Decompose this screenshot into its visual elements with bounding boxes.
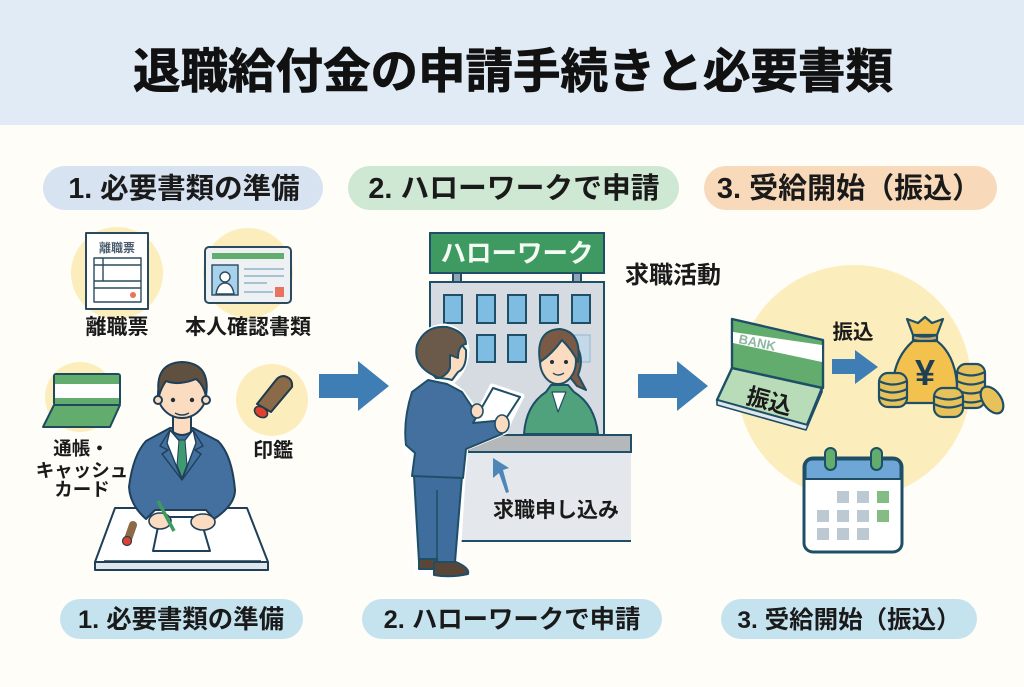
illustration: applicant standing — [405, 326, 522, 576]
icon: bankbook — [43, 362, 120, 432]
desk — [95, 508, 268, 570]
head — [423, 340, 466, 380]
arrow: step 1 to 2 — [319, 361, 389, 411]
document held — [473, 388, 520, 423]
service counter — [460, 435, 631, 541]
arrow: to job application — [493, 458, 509, 493]
label: job search activity: 求職活動 — [625, 262, 721, 289]
step pill 3 — [704, 166, 997, 210]
paper — [153, 517, 210, 551]
icon: money bag and coins: ¥ — [915, 352, 935, 393]
step pill 2: 2. ハローワークで申請 — [368, 173, 660, 205]
title: 退職給付金の申請手続きと必要書類 — [133, 46, 893, 99]
label: bankbook and cash card — [36, 438, 128, 500]
step pill 1: 1. 必要書類の準備 — [68, 173, 300, 205]
illustration: applicant at desk — [95, 362, 268, 570]
illustration: Hello Work building — [430, 233, 604, 437]
icon: ID card — [203, 228, 293, 318]
label: bankbook and cash card: 通帳・ — [53, 438, 109, 459]
icon: bankbook with transfer — [717, 319, 823, 430]
desk stamp — [127, 525, 133, 542]
white halo — [405, 326, 522, 576]
suit — [129, 428, 235, 519]
icon: personal seal — [236, 364, 308, 436]
illustration: Hello Work building: ハローワーク — [440, 240, 594, 268]
step pill 3: 3. 受給開始（振込） — [717, 172, 981, 205]
icon: separation notice — [71, 227, 163, 319]
jacket — [405, 380, 502, 478]
label: separation notice: 離職票 — [86, 316, 148, 339]
bottom pill 1: 1. 必要書類の準備 — [78, 606, 284, 634]
icon: money bag and coins — [879, 317, 1008, 417]
step pill 2 — [348, 166, 679, 210]
shoes — [419, 559, 437, 569]
step pill 1 — [43, 166, 323, 210]
label: ID documents: 本人確認書類 — [185, 316, 311, 339]
bottom pill 1 — [60, 599, 303, 639]
bottom pill 2 — [362, 599, 662, 639]
label: job application: 求職申し込み — [493, 499, 619, 522]
icon: calendar — [804, 448, 902, 552]
legs — [414, 476, 462, 562]
pen — [158, 501, 174, 531]
bottom pill 3 — [721, 599, 977, 639]
label: transfer: 振込 — [832, 321, 874, 344]
bottom pill 3: 3. 受給開始（振込） — [737, 606, 961, 634]
icon: bankbook with transfer: 振込 — [744, 383, 795, 420]
head — [173, 414, 191, 435]
bottom pill 2: 2. ハローワークで申請 — [384, 606, 640, 634]
icon: separation notice: 離職票 — [99, 240, 135, 255]
hands — [149, 513, 171, 529]
background circle: payment — [737, 265, 971, 499]
label: personal seal: 印鑑 — [253, 439, 293, 462]
label: bankbook and cash card: キャッシュ — [36, 460, 128, 481]
label: bankbook and cash card: カード — [54, 479, 110, 500]
illustration: staff member — [524, 329, 598, 434]
icon: bankbook with transfer: BANK — [737, 331, 778, 354]
arrow: step 2 to 3 — [638, 361, 708, 411]
arrow: transfer — [832, 350, 878, 384]
header band — [0, 0, 1024, 125]
